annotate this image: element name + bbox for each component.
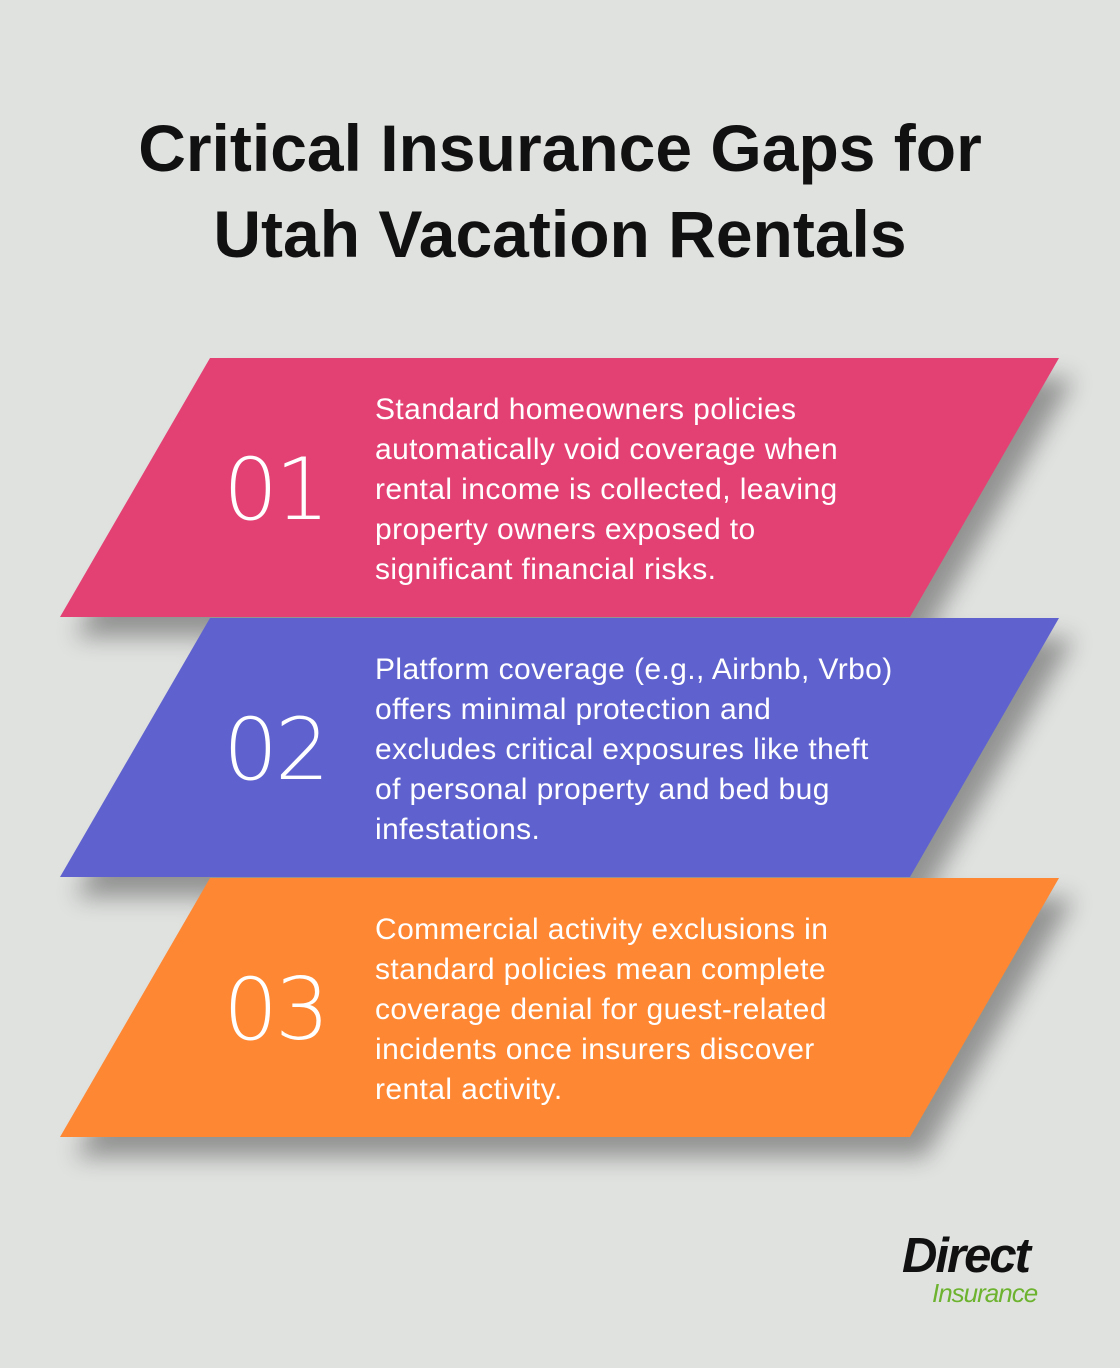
text 2: infestations. bbox=[375, 813, 540, 846]
text 3: standard policies mean complete bbox=[375, 953, 826, 986]
text 3: Commercial activity exclusions in bbox=[375, 913, 828, 946]
text 2: offers minimal protection and bbox=[375, 693, 771, 726]
logo: Direct bbox=[902, 1229, 1029, 1283]
text 2 bbox=[375, 653, 893, 846]
band 1 bbox=[60, 358, 1059, 617]
number 02: 02 bbox=[223, 700, 327, 800]
text 1: significant financial risks. bbox=[375, 553, 716, 586]
text 1: automatically void coverage when bbox=[375, 433, 838, 466]
title: Utah Vacation Rentals bbox=[213, 197, 907, 271]
text 1: property owners exposed to bbox=[375, 513, 756, 546]
text 2: of personal property and bed bug bbox=[375, 773, 830, 806]
title: Critical Insurance Gaps for bbox=[138, 111, 982, 185]
text 1 bbox=[375, 393, 838, 586]
text 2: excludes critical exposures like theft bbox=[375, 733, 869, 766]
title bbox=[138, 111, 982, 271]
text 3: incidents once insurers discover bbox=[375, 1033, 815, 1066]
number 03: 03 bbox=[223, 960, 327, 1060]
number 01: 01 bbox=[223, 440, 327, 540]
text 3: coverage denial for guest-related bbox=[375, 993, 827, 1026]
band 2 bbox=[60, 618, 1059, 877]
text 2: Platform coverage (e.g., Airbnb, Vrbo) bbox=[375, 653, 893, 686]
text 3: rental activity. bbox=[375, 1073, 563, 1106]
text 1: Standard homeowners policies bbox=[375, 393, 796, 426]
text 1: rental income is collected, leaving bbox=[375, 473, 838, 506]
band 3 bbox=[60, 878, 1059, 1137]
text 3 bbox=[375, 913, 828, 1106]
logo bbox=[902, 1229, 1038, 1308]
logo: Insurance bbox=[932, 1278, 1037, 1308]
